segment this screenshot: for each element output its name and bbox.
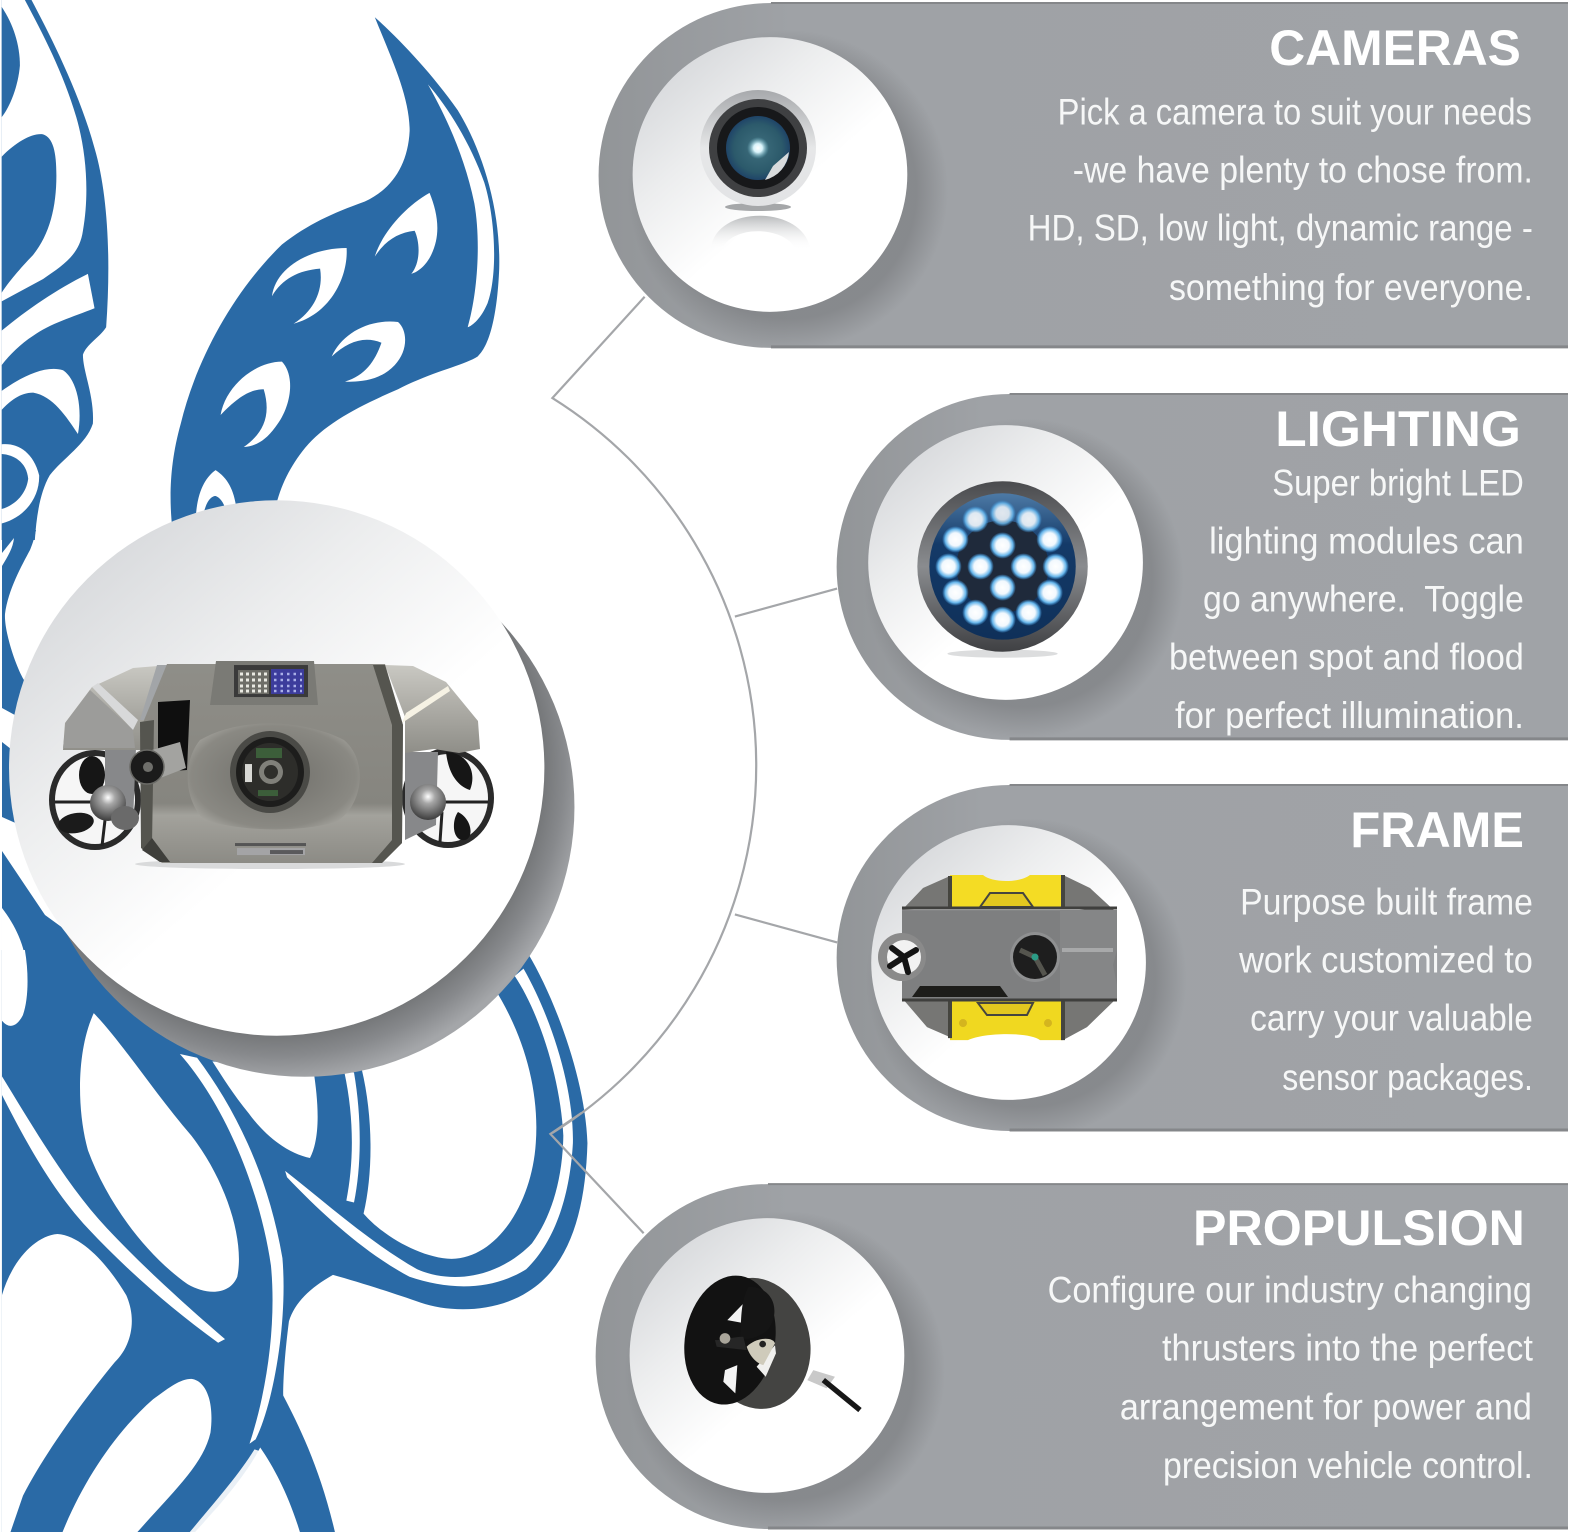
central scoop (188, 724, 360, 829)
description: Super bright LED (1272, 461, 1524, 503)
description: between spot and flood (1169, 636, 1524, 678)
heading: PROPULSION (1193, 1200, 1525, 1256)
heading: LIGHTING (1275, 401, 1521, 457)
disc (633, 37, 907, 312)
rear thruster (878, 933, 926, 981)
top light module (210, 661, 318, 705)
background: blue tribal art, lower interlaced bands (2, 950, 587, 1532)
left thruster (52, 748, 139, 847)
description: carry your valuable (1250, 997, 1533, 1039)
dark frame straps (140, 665, 403, 863)
grey side plates (902, 875, 1117, 1040)
yellow frame bottom (950, 1000, 1063, 1040)
description (1238, 880, 1533, 1098)
disc shadow (889, 830, 1176, 1128)
description: sensor packages. (1282, 1056, 1533, 1098)
panel background (599, 3, 1568, 348)
description: Configure our industry changing (1048, 1268, 1532, 1310)
disc shadow (35, 537, 574, 1077)
background: blue tribal art, left edge strip (2, 530, 100, 970)
icon: camera lens (700, 90, 816, 250)
description (1169, 461, 1524, 736)
panel: cameras (599, 3, 1568, 351)
body name plate (235, 843, 306, 855)
side camera tube (130, 700, 190, 784)
description: -we have plenty to chose from. (1073, 148, 1533, 190)
disc shadow (650, 1223, 935, 1522)
heading: FRAME (1350, 802, 1524, 858)
panel background (596, 1184, 1568, 1529)
yellow frame top (950, 875, 1063, 908)
icon: thruster (674, 1268, 860, 1419)
background: blue tribal art, feather with eye shapes (171, 17, 499, 530)
background: blue tribal art, upper left form (2, 0, 108, 540)
disc (868, 425, 1143, 700)
description: work customized to (1238, 939, 1533, 981)
right thruster (405, 751, 491, 845)
disc shadow (653, 42, 938, 340)
description: lighting modules can (1209, 519, 1524, 561)
left wing housing (63, 665, 170, 752)
right wing housing (385, 665, 480, 753)
panel: lighting (837, 394, 1568, 740)
vehicle illustration: ROV front view (52, 661, 491, 869)
front camera port (1010, 932, 1060, 982)
central hub: vehicle disc (9, 500, 574, 1077)
description: Purpose built frame (1240, 880, 1533, 922)
disc (871, 825, 1146, 1100)
panel background (837, 394, 1568, 740)
disc (630, 1218, 904, 1493)
disc face (9, 500, 544, 1036)
description: precision vehicle control. (1163, 1444, 1533, 1486)
icon: LED module (917, 481, 1088, 658)
description: thrusters into the perfect (1162, 1327, 1534, 1369)
icon: vehicle frame side view (878, 875, 1117, 1040)
connector arc and lines (550, 297, 837, 1233)
panel: frame (837, 785, 1568, 1139)
description: for perfect illumination. (1175, 694, 1524, 736)
description (1048, 1268, 1534, 1486)
description: arrangement for power and (1120, 1386, 1532, 1428)
grey body (902, 910, 1117, 1000)
main body (140, 664, 403, 863)
description: go anywhere. Toggle (1203, 578, 1524, 620)
panel: propulsion (596, 1184, 1568, 1532)
main camera lens (230, 731, 310, 813)
panel background (837, 785, 1568, 1131)
disc shadow (888, 429, 1174, 728)
description (1028, 90, 1533, 308)
heading: CAMERAS (1269, 20, 1521, 76)
description: something for everyone. (1169, 266, 1533, 308)
